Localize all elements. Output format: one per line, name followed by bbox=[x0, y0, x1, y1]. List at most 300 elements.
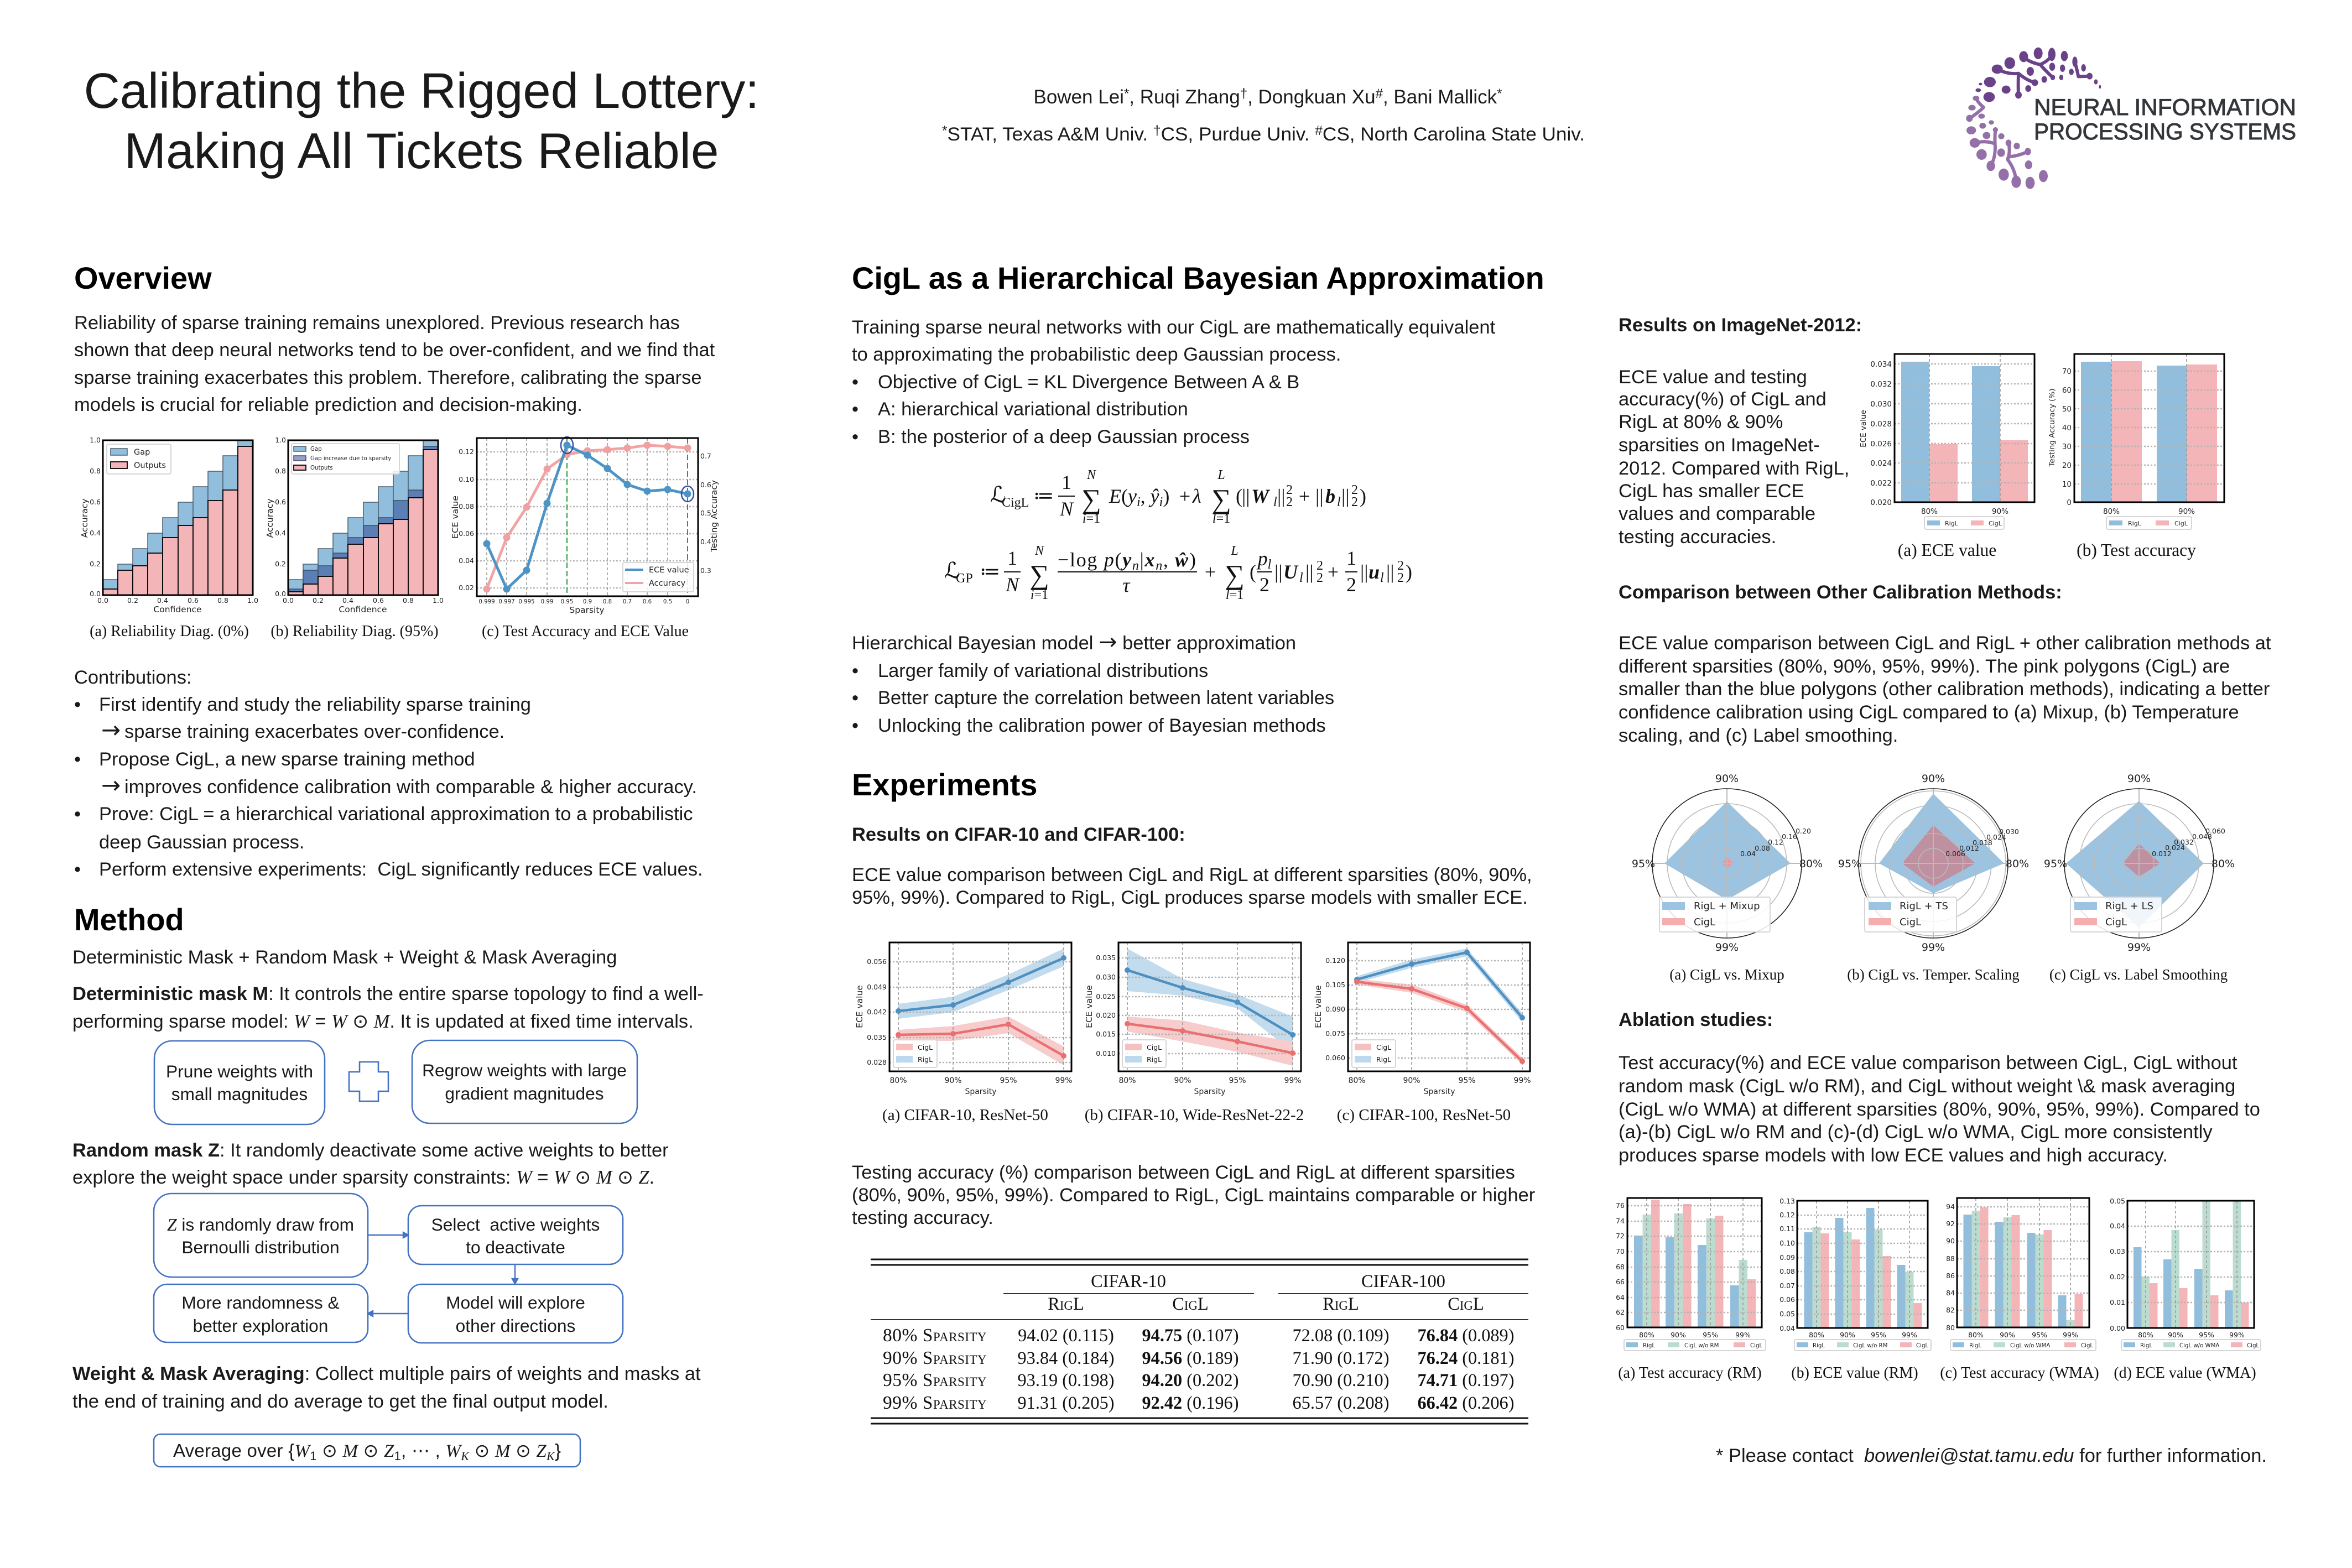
text block: contributions: → bbox=[101, 772, 121, 799]
text block: contributions: Propose CigL, a new sparse training method bbox=[99, 749, 475, 770]
line chart: CIFAR-10 Wide-ResNet-22-2 ECE: 0.025 bbox=[1096, 992, 1116, 1001]
formula box: average over: M ⊙ Z bbox=[342, 1440, 394, 1461]
equation: GP loss: ℒ bbox=[944, 558, 960, 583]
chart: reliability diagram 0%: Confidence bbox=[153, 605, 202, 614]
line chart: CIFAR-10 Wide-ResNet-22-2 ECE bbox=[1084, 942, 1302, 1096]
bar chart: test accuracy RM: CigL bbox=[1750, 1343, 1762, 1349]
formula box: average over: M ⊙ Z bbox=[495, 1440, 547, 1461]
radar chart: CigL vs Label Smoothing: 80% bbox=[2211, 858, 2235, 870]
text block: deterministic mask bbox=[72, 983, 704, 1032]
text block: ImageNet description: sparsities on ImageNet- bbox=[1619, 435, 1820, 456]
text block: contributions: Contributions: bbox=[74, 667, 191, 688]
bar chart: ImageNet ECE value: 0.030 bbox=[1870, 400, 1892, 409]
equation: CigL loss: 2 bbox=[1351, 483, 1358, 497]
radar chart: CigL vs Label Smoothing bbox=[2044, 773, 2235, 954]
bar chart: test accuracy RM: 66 bbox=[1616, 1278, 1625, 1286]
bar chart: ImageNet ECE value: 0.026 bbox=[1870, 440, 1892, 449]
bar chart: ECE value WMA: 0.00 bbox=[2110, 1324, 2125, 1332]
line chart: CIFAR-10 Wide-ResNet-22-2 ECE: 0.015 bbox=[1096, 1030, 1116, 1038]
table: testing accuracy results: CIFAR-100 bbox=[1361, 1271, 1445, 1291]
captions: ablation charts: (c) Test accuracy (WMA) bbox=[1940, 1364, 2099, 1382]
equation: GP loss: 2 bbox=[1346, 574, 1356, 596]
formula box: average over: K bbox=[546, 1449, 555, 1463]
bar chart: test accuracy WMA: 95% bbox=[2032, 1331, 2047, 1339]
equation: CigL loss: + bbox=[1179, 485, 1190, 507]
equation: GP loss: || bbox=[1386, 561, 1394, 583]
chart: reliability diagram 0%: 0.2 bbox=[90, 560, 101, 568]
bar chart: ImageNet ECE value: RigL bbox=[1945, 520, 1959, 527]
equation: CigL loss: 2 bbox=[1286, 483, 1293, 497]
text block: equivalence statement: Training sparse neural networks with our CigL are mathematically equivalent bbox=[852, 317, 1496, 338]
radar chart: CigL vs Temperature Scaling: 99% bbox=[1922, 941, 1945, 954]
chart: reliability diagram 95%: Gap bbox=[310, 446, 322, 452]
chart: reliability diagram 0%: 0.8 bbox=[217, 596, 228, 605]
bar chart: ImageNet ECE value: 0.028 bbox=[1870, 420, 1892, 429]
bar chart: test accuracy WMA: 92 bbox=[1946, 1220, 1955, 1228]
captions: overview figures: (b) Reliability Diag. (95%) bbox=[270, 623, 439, 640]
chart: reliability diagram 0%: Gap bbox=[134, 448, 150, 457]
equation: CigL loss: ) bbox=[1163, 485, 1169, 507]
bar chart: test accuracy RM: 80% bbox=[1639, 1331, 1654, 1339]
text block: ablation description: Test accuracy(%) and ECE value comparison between CigL, CigL without bbox=[1619, 1053, 2237, 1074]
logo: neural information processing systems bbox=[1966, 48, 2296, 189]
radar chart: CigL vs Mixup bbox=[1632, 773, 1823, 954]
chart: reliability diagram 95%: 1.0 bbox=[275, 436, 286, 444]
chart: reliability diagram 95%: 0.4 bbox=[275, 529, 286, 537]
table: testing accuracy results: 94.75 (0.107) bbox=[1142, 1325, 1239, 1345]
table: testing accuracy results: 94.56 (0.189) bbox=[1142, 1348, 1239, 1368]
text block: calibration comparison: ECE value comparison between CigL and RigL + other calibration methods at bbox=[1619, 633, 2271, 654]
bar chart: ImageNet test accuracy: 50 bbox=[2062, 405, 2072, 414]
equation: GP loss bbox=[944, 544, 1412, 602]
chart: test accuracy and ECE value vs sparsity: 0.06 bbox=[459, 529, 474, 538]
bar chart: ECE value RM: 0.04 bbox=[1779, 1324, 1795, 1332]
equation: CigL loss: λ bbox=[1192, 485, 1201, 507]
chart: test accuracy and ECE value vs sparsity: 0.5 bbox=[700, 509, 711, 517]
text block: hierarchical bayesian benefits: Unlocking the calibration power of Bayesian methods bbox=[878, 715, 1326, 736]
bar chart: ECE value RM: 80% bbox=[1809, 1331, 1824, 1339]
diagram: prune plus regrow: Regrow weights with large bbox=[422, 1060, 627, 1080]
bar chart: test accuracy RM: 74 bbox=[1616, 1217, 1625, 1225]
line chart: CIFAR-100 ResNet-50 ECE: 0.075 bbox=[1325, 1029, 1345, 1038]
flow diagram: random mask process: Bernoulli distribution bbox=[181, 1237, 340, 1257]
text block: deterministic mask: performing sparse model: W = W ⊙ M. It is updated at fixed time intervals. bbox=[72, 1011, 694, 1032]
table: testing accuracy results: 71.90 (0.172) bbox=[1293, 1348, 1389, 1368]
text block: calibration comparison: scaling, and (c) Label smoothing. bbox=[1619, 725, 1898, 746]
text block: calibration comparison: smaller than the blue polygons (other calibration methods), indicating a better bbox=[1619, 679, 2270, 700]
line chart: CIFAR-10 Wide-ResNet-22-2 ECE: 99% bbox=[1284, 1076, 1302, 1085]
captions: CIFAR charts: (b) CIFAR-10, Wide-ResNet-22-2 bbox=[1085, 1106, 1304, 1124]
equation: GP loss: u bbox=[1368, 561, 1380, 583]
text block: hierarchical bayesian benefits: • bbox=[852, 660, 858, 681]
flow diagram: random mask process: Z is randomly draw from bbox=[167, 1215, 354, 1234]
chart: test accuracy and ECE value vs sparsity: 0.8 bbox=[603, 599, 612, 605]
line chart: CIFAR-100 ResNet-50 ECE: 0.105 bbox=[1325, 981, 1345, 989]
bar chart: ImageNet ECE value: 0.020 bbox=[1870, 498, 1892, 507]
text block: ablation description: (a)-(b) CigL w/o RM and (c)-(d) CigL w/o WMA, CigL more consistently bbox=[1619, 1122, 2213, 1143]
table: testing accuracy results: 92.42 (0.196) bbox=[1142, 1393, 1239, 1413]
equation: CigL loss: i bbox=[1137, 495, 1141, 509]
radar chart: CigL vs Mixup: 95% bbox=[1632, 858, 1655, 870]
bar chart: ECE value WMA: 95% bbox=[2199, 1331, 2214, 1339]
text block: equivalence statement: A: hierarchical variational distribution bbox=[878, 399, 1188, 420]
radar chart: CigL vs Mixup: 0.16 bbox=[1782, 832, 1797, 841]
bar chart: ECE value RM: CigL bbox=[1916, 1343, 1928, 1349]
line chart: CIFAR-100 ResNet-50 ECE bbox=[1313, 942, 1531, 1096]
chart: test accuracy and ECE value vs sparsity: 0.7 bbox=[700, 452, 711, 460]
equation: GP loss: ( bbox=[1250, 561, 1256, 583]
text block: random mask: Random mask Z: It randomly deactivate some active weights to better bbox=[72, 1140, 669, 1161]
chart: test accuracy and ECE value vs sparsity: 0.997 bbox=[498, 599, 515, 605]
chart: reliability diagram 95%: Gap increase due to sparsity bbox=[310, 456, 391, 462]
line chart: CIFAR-100 ResNet-50 ECE: 0.060 bbox=[1325, 1054, 1345, 1062]
equation: GP loss: U bbox=[1283, 561, 1299, 583]
text block: contributions: First identify and study the reliability sparse training bbox=[99, 694, 531, 715]
equation: GP loss: 2 bbox=[1317, 559, 1323, 573]
diagram: prune plus regrow bbox=[154, 1040, 637, 1124]
line chart: CIFAR-100 ResNet-50 ECE: 90% bbox=[1403, 1076, 1420, 1085]
equation: CigL loss: ∑ bbox=[1081, 483, 1101, 514]
equation: CigL loss: b bbox=[1325, 485, 1335, 507]
line chart: CIFAR-10 ResNet-50 ECE: Sparsity bbox=[965, 1087, 997, 1096]
radar chart: CigL vs Temperature Scaling: 0.006 bbox=[1945, 850, 1965, 858]
text block: contributions: Prove: CigL = a hierarchical variational approximation to a probabilistic bbox=[99, 804, 693, 825]
bar chart: ECE value RM: CigL w/o RM bbox=[1853, 1343, 1887, 1349]
chart: test accuracy and ECE value vs sparsity: 0.9 bbox=[583, 599, 592, 605]
bar chart: test accuracy WMA: CigL bbox=[2081, 1343, 2093, 1349]
bar chart: ECE value WMA bbox=[2110, 1197, 2261, 1351]
radar chart: CigL vs Temperature Scaling: RigL + TS bbox=[1900, 900, 1948, 912]
text block: testing accuracy comparison: Testing accuracy (%) comparison between CigL and RigL at different sparsities bbox=[852, 1162, 1515, 1183]
chart: test accuracy and ECE value vs sparsity: 0.5 bbox=[663, 599, 672, 605]
text block: ablation description bbox=[1619, 1053, 2260, 1166]
line chart: CIFAR-10 Wide-ResNet-22-2 ECE: Sparsity bbox=[1194, 1087, 1226, 1096]
bar chart: test accuracy RM: 64 bbox=[1616, 1293, 1625, 1301]
line chart: CIFAR-10 ResNet-50 ECE: 95% bbox=[1000, 1076, 1017, 1085]
authors and affiliations: CS, North Carolina State Univ. bbox=[1323, 124, 1585, 145]
text block: equivalence statement: to approximating the probabilistic deep Gaussian process. bbox=[852, 344, 1341, 365]
chart: test accuracy and ECE value vs sparsity: Sparsity bbox=[569, 605, 605, 615]
equation: CigL loss: W bbox=[1251, 485, 1271, 507]
subheading: ablation studies: Ablation studies: bbox=[1619, 1009, 1773, 1030]
flow diagram: random mask process: More randomness & bbox=[181, 1293, 340, 1312]
radar chart: CigL vs Temperature Scaling: 0.024 bbox=[1986, 833, 2006, 841]
radar chart: CigL vs Label Smoothing: 0.032 bbox=[2174, 838, 2194, 846]
table: testing accuracy results: CIFAR-10 bbox=[1091, 1271, 1166, 1291]
bar chart: ECE value WMA: 99% bbox=[2229, 1331, 2245, 1339]
equation: GP loss: l bbox=[1380, 571, 1384, 585]
text block: contributions: sparse training exacerbates over-confidence. bbox=[124, 721, 504, 742]
equation: GP loss: 1 bbox=[1346, 547, 1356, 569]
bar chart: ECE value RM: 99% bbox=[1902, 1331, 1917, 1339]
equation: GP loss: || bbox=[1305, 561, 1313, 583]
text block: CIFAR ECE comparison: 95%, 99%). Compared to RigL, CigL produces sparse models with smaller ECE. bbox=[852, 887, 1528, 908]
bar chart: ImageNet test accuracy: CigL bbox=[2174, 520, 2188, 527]
table: testing accuracy results: RigL bbox=[1048, 1294, 1084, 1314]
authors and affiliations: # bbox=[1315, 123, 1323, 138]
chart: reliability diagram 95%: 0.6 bbox=[275, 498, 286, 506]
text block: overview intro bbox=[74, 312, 715, 415]
bar chart: ImageNet ECE value bbox=[1859, 354, 2034, 529]
radar chart: CigL vs Label Smoothing: RigL + LS bbox=[2105, 900, 2153, 912]
chart: test accuracy and ECE value vs sparsity: 0.6 bbox=[700, 481, 711, 489]
line chart: CIFAR-100 ResNet-50 ECE: 80% bbox=[1348, 1076, 1366, 1085]
equation: GP loss: 1 bbox=[1007, 547, 1017, 569]
chart: reliability diagram 0%: 0.2 bbox=[127, 596, 138, 605]
bar chart: test accuracy RM: CigL w/o RM bbox=[1684, 1343, 1719, 1349]
radar chart: CigL vs Label Smoothing: 0.048 bbox=[2192, 832, 2212, 841]
equation: CigL loss: 2 bbox=[1351, 495, 1358, 509]
chart: test accuracy and ECE value vs sparsity: 0.99 bbox=[541, 599, 553, 605]
equation: GP loss: ∑ bbox=[1029, 559, 1049, 590]
chart: reliability diagram 0%: 0.6 bbox=[90, 498, 101, 506]
chart: reliability diagram 95% bbox=[265, 436, 444, 614]
title: Calibrating the Rigged Lottery: bbox=[84, 63, 759, 119]
bar chart: ImageNet test accuracy: 80% bbox=[2103, 507, 2120, 516]
chart: test accuracy and ECE value vs sparsity: 0.3 bbox=[700, 566, 711, 575]
diagram: prune plus regrow: gradient magnitudes bbox=[445, 1083, 604, 1103]
radar chart: CigL vs Temperature Scaling: 80% bbox=[2006, 858, 2029, 870]
chart: reliability diagram 95%: 0.0 bbox=[283, 596, 294, 605]
table: testing accuracy results: CigL bbox=[1448, 1294, 1484, 1314]
text block: calibration comparison: different sparsities (80%, 90%, 95%, 99%). The pink polygons (CigL) are bbox=[1619, 656, 2230, 677]
line chart: CIFAR-100 ResNet-50 ECE: RigL bbox=[1376, 1055, 1391, 1064]
equation: GP loss: l=1 bbox=[1226, 588, 1243, 602]
text block: random mask bbox=[72, 1140, 669, 1188]
text block: deterministic mask: Deterministic mask M: It controls the entire sparse topology to find a well- bbox=[72, 983, 704, 1004]
bar chart: ECE value RM: 0.08 bbox=[1779, 1267, 1795, 1275]
bar chart: test accuracy RM: 62 bbox=[1616, 1308, 1625, 1316]
bar chart: test accuracy WMA: 94 bbox=[1946, 1202, 1955, 1211]
bar chart: ImageNet test accuracy: 60 bbox=[2062, 386, 2072, 395]
chart: test accuracy and ECE value vs sparsity: 0.04 bbox=[459, 556, 474, 565]
captions: ImageNet charts: (b) Test accuracy bbox=[2077, 540, 2196, 560]
captions: overview figures bbox=[90, 623, 689, 640]
text block: overview intro: shown that deep neural networks tend to be over-confident, and we find that bbox=[74, 340, 715, 361]
equation: GP loss: N bbox=[1005, 574, 1020, 596]
bar chart: ImageNet ECE value: 0.032 bbox=[1870, 380, 1892, 389]
bar chart: ECE value WMA: CigL bbox=[2247, 1343, 2259, 1349]
line chart: CIFAR-100 ResNet-50 ECE: 0.120 bbox=[1325, 956, 1345, 965]
captions: radar charts: (a) CigL vs. Mixup bbox=[1669, 966, 1784, 983]
captions: ImageNet charts bbox=[1898, 540, 2196, 560]
equation: GP loss: + bbox=[1328, 561, 1339, 583]
text block: equivalence statement: Objective of CigL = KL Divergence Between A & B bbox=[878, 372, 1299, 393]
bar chart: ImageNet ECE value: 80% bbox=[1921, 507, 1938, 516]
bar chart: test accuracy RM: 90% bbox=[1671, 1331, 1686, 1339]
formula box: average over: } bbox=[555, 1440, 561, 1461]
text block: hierarchical bayesian benefits: • bbox=[852, 687, 858, 709]
equation: CigL loss: i bbox=[1159, 495, 1163, 509]
subheading: ImageNet results: Results on ImageNet-2012: bbox=[1619, 315, 1862, 336]
bar chart: ECE value WMA: 90% bbox=[2168, 1331, 2183, 1339]
equation: CigL loss: l=1 bbox=[1213, 512, 1230, 526]
bar chart: ECE value RM: 95% bbox=[1871, 1331, 1886, 1339]
text block: contributions: deep Gaussian process. bbox=[99, 832, 304, 853]
line chart: CIFAR-10 ResNet-50 ECE: 0.049 bbox=[867, 983, 887, 991]
text block: CIFAR ECE comparison bbox=[852, 864, 1532, 908]
bar chart: ImageNet test accuracy: 20 bbox=[2062, 461, 2072, 470]
line chart: CIFAR-10 ResNet-50 ECE: 0.028 bbox=[867, 1058, 887, 1066]
bar chart: test accuracy RM: 72 bbox=[1616, 1232, 1625, 1240]
table: testing accuracy results: 91.31 (0.205) bbox=[1018, 1393, 1114, 1413]
equation: CigL loss: || bbox=[1315, 485, 1323, 507]
chart: reliability diagram 95%: 0.0 bbox=[275, 590, 286, 598]
chart: test accuracy and ECE value vs sparsity: 0.6 bbox=[643, 599, 652, 605]
line chart: CIFAR-100 ResNet-50 ECE: Sparsity bbox=[1423, 1087, 1455, 1096]
captions: radar charts: (b) CigL vs. Temper. Scaling bbox=[1847, 966, 2020, 983]
text block: testing accuracy comparison: (80%, 90%, 95%, 99%). Compared to RigL, CigL maintains comparable or higher bbox=[852, 1185, 1535, 1206]
bar chart: ImageNet ECE value: CigL bbox=[1989, 520, 2002, 527]
line chart: CIFAR-10 Wide-ResNet-22-2 ECE: RigL bbox=[1147, 1055, 1162, 1064]
captions: ImageNet charts: (a) ECE value bbox=[1898, 540, 1996, 560]
text block: testing accuracy comparison bbox=[852, 1162, 1535, 1228]
table: testing accuracy results: 65.57 (0.208) bbox=[1293, 1393, 1389, 1413]
captions: radar charts bbox=[1669, 966, 2228, 983]
equation: GP loss: || bbox=[1360, 561, 1368, 583]
text block: ablation description: (CigL w/o WMA) at different sparsities (80%, 90%, 95%, 99%). Compared to bbox=[1619, 1099, 2260, 1120]
formula box: average over: , ⋯ , bbox=[401, 1440, 445, 1461]
equation: CigL loss: 2 bbox=[1286, 495, 1293, 509]
equation: GP loss: N bbox=[1034, 544, 1045, 558]
equation: CigL loss: N bbox=[1059, 498, 1074, 520]
equation: CigL loss bbox=[990, 468, 1366, 526]
radar chart: CigL vs Temperature Scaling: 90% bbox=[1922, 773, 1945, 785]
captions: ablation charts: (a) Test accuracy (RM) bbox=[1618, 1364, 1762, 1382]
chart: reliability diagram 0%: 0.0 bbox=[90, 590, 101, 598]
bar chart: ImageNet ECE value: 0.034 bbox=[1870, 360, 1892, 369]
subheading: other calibration methods: Comparison between Other Calibration Methods: bbox=[1619, 582, 2062, 603]
chart: reliability diagram 0%: 0.4 bbox=[90, 529, 101, 537]
chart: reliability diagram 95%: 0.8 bbox=[403, 596, 414, 605]
radar chart: CigL vs Mixup: 0.08 bbox=[1755, 844, 1770, 852]
bar chart: ECE value RM: 0.05 bbox=[1779, 1310, 1795, 1318]
radar chart: CigL vs Label Smoothing: CigL bbox=[2105, 916, 2127, 928]
bar chart: test accuracy RM: 70 bbox=[1616, 1247, 1625, 1256]
equation: CigL loss: E(y bbox=[1109, 485, 1137, 507]
chart: test accuracy and ECE value vs sparsity: 0 bbox=[686, 599, 689, 605]
text block: overview intro: Reliability of sparse training remains unexplored. Previous research has bbox=[74, 312, 680, 334]
radar chart: CigL vs Mixup: 0.04 bbox=[1740, 850, 1756, 858]
chart: test accuracy and ECE value vs sparsity: ECE value bbox=[649, 566, 689, 575]
chart: reliability diagram 0%: 0.4 bbox=[157, 596, 168, 605]
table: testing accuracy results: 74.71 (0.197) bbox=[1418, 1370, 1514, 1390]
line chart: CIFAR-10 ResNet-50 ECE: 0.056 bbox=[867, 957, 887, 966]
chart: test accuracy and ECE value vs sparsity bbox=[450, 437, 719, 615]
chart: reliability diagram 0%: 0.0 bbox=[97, 596, 108, 605]
line chart: CIFAR-10 Wide-ResNet-22-2 ECE: 95% bbox=[1229, 1076, 1246, 1085]
chart: test accuracy and ECE value vs sparsity: 0.999 bbox=[478, 599, 495, 605]
line chart: CIFAR-100 ResNet-50 ECE: CigL bbox=[1376, 1043, 1391, 1051]
captions: ablation charts: (d) ECE value (WMA) bbox=[2114, 1364, 2256, 1382]
bar chart: ECE value RM: 0.13 bbox=[1779, 1197, 1795, 1205]
bar chart: ECE value WMA: 0.02 bbox=[2110, 1273, 2125, 1281]
formula box: average over: ⊙ bbox=[469, 1440, 495, 1461]
text block: ImageNet description: 2012. Compared with RigL, bbox=[1619, 458, 1849, 479]
diagram: prune plus regrow: small magnitudes bbox=[171, 1084, 308, 1104]
radar chart: CigL vs Mixup: 99% bbox=[1715, 941, 1739, 954]
radar chart: CigL vs Label Smoothing: 90% bbox=[2127, 773, 2151, 785]
line chart: CIFAR-10 Wide-ResNet-22-2 ECE: ECE value bbox=[1084, 985, 1094, 1028]
bar chart: test accuracy WMA: 99% bbox=[2063, 1331, 2078, 1339]
captions: radar charts: (c) CigL vs. Label Smoothing bbox=[2049, 966, 2228, 983]
line chart: CIFAR-10 ResNet-50 ECE: 0.042 bbox=[867, 1008, 887, 1016]
bar chart: ECE value RM: 0.12 bbox=[1779, 1211, 1795, 1219]
authors and affiliations: CS, Purdue Univ. bbox=[1161, 124, 1315, 145]
chart: reliability diagram 95%: 0.2 bbox=[275, 560, 286, 568]
chart: test accuracy and ECE value vs sparsity: Testing Accuracy bbox=[709, 480, 719, 553]
text block: ImageNet description: CigL has smaller ECE bbox=[1619, 481, 1804, 502]
bar chart: test accuracy RM bbox=[1616, 1198, 1766, 1351]
chart: reliability diagram 0% bbox=[80, 436, 258, 614]
bar chart: test accuracy RM: 76 bbox=[1616, 1201, 1625, 1210]
bar chart: ECE value RM: 0.09 bbox=[1779, 1253, 1795, 1262]
text block: ImageNet description bbox=[1619, 367, 1849, 548]
radar chart: CigL vs Mixup: RigL + Mixup bbox=[1694, 900, 1760, 912]
bar chart: ECE value RM: RigL bbox=[1813, 1343, 1825, 1349]
line chart: CIFAR-10 ResNet-50 ECE bbox=[855, 942, 1073, 1096]
text block: contributions: Perform extensive experiments: CigL significantly reduces ECE values. bbox=[99, 859, 703, 880]
bar chart: ImageNet test accuracy: 40 bbox=[2062, 424, 2072, 433]
bar chart: ImageNet test accuracy: 70 bbox=[2062, 367, 2072, 376]
text block: contributions: → bbox=[101, 716, 121, 743]
text block: calibration comparison bbox=[1619, 633, 2271, 746]
line chart: CIFAR-100 ResNet-50 ECE: 99% bbox=[1513, 1076, 1531, 1085]
radar chart: CigL vs Temperature Scaling: CigL bbox=[1900, 916, 1921, 928]
chart: reliability diagram 95%: Confidence bbox=[339, 605, 387, 614]
bar chart: test accuracy RM: 95% bbox=[1703, 1331, 1718, 1339]
bar chart: ImageNet test accuracy: 0 bbox=[2067, 498, 2072, 507]
bar chart: test accuracy WMA: CigL w/o WMA bbox=[2010, 1343, 2050, 1349]
chart: test accuracy and ECE value vs sparsity: 0.12 bbox=[459, 447, 474, 456]
bar chart: ECE value RM: 0.10 bbox=[1779, 1239, 1795, 1247]
equation: GP loss: ≔ bbox=[980, 560, 1000, 582]
chart: reliability diagram 95%: 1.0 bbox=[433, 596, 444, 605]
equation: GP loss: | bbox=[1140, 549, 1144, 571]
bar chart: test accuracy RM: 99% bbox=[1735, 1331, 1751, 1339]
equation: GP loss: p bbox=[1256, 548, 1268, 570]
text block: weight and mask averaging: Weight & Mask Averaging: Collect multiple pairs of weights and masks at bbox=[72, 1363, 701, 1384]
chart: test accuracy and ECE value vs sparsity: 0.995 bbox=[518, 599, 535, 605]
captions: CIFAR charts: (a) CIFAR-10, ResNet-50 bbox=[882, 1106, 1048, 1124]
radar chart: CigL vs Mixup: 80% bbox=[1799, 858, 1823, 870]
line chart: CIFAR-10 Wide-ResNet-22-2 ECE: 0.020 bbox=[1096, 1011, 1116, 1019]
radar chart: CigL vs Label Smoothing: 0.012 bbox=[2152, 850, 2172, 858]
table: testing accuracy results bbox=[871, 1259, 1528, 1424]
equation: CigL loss: + bbox=[1299, 485, 1310, 507]
bar chart: ECE value WMA: 0.03 bbox=[2110, 1247, 2125, 1256]
chart: reliability diagram 95%: 0.6 bbox=[373, 596, 384, 605]
bar chart: ECE value RM bbox=[1779, 1197, 1931, 1351]
bar chart: ECE value WMA: 0.01 bbox=[2110, 1298, 2125, 1306]
radar chart: CigL vs Mixup: 0.20 bbox=[1796, 827, 1811, 835]
radar chart: CigL vs Temperature Scaling: 0.012 bbox=[1959, 844, 1979, 852]
authors and affiliations: † bbox=[1240, 86, 1247, 101]
bar chart: test accuracy WMA: 88 bbox=[1946, 1254, 1955, 1263]
equation: CigL loss: l bbox=[1273, 495, 1277, 509]
table: testing accuracy results: 99% Sparsity bbox=[883, 1393, 987, 1413]
text block: ImageNet description: testing accuracies. bbox=[1619, 527, 1776, 548]
authors and affiliations: * bbox=[1497, 86, 1502, 101]
authors and affiliations: STAT, Texas A&M Univ. bbox=[948, 124, 1153, 145]
table: testing accuracy results: RigL bbox=[1323, 1294, 1359, 1314]
text block: contributions bbox=[74, 667, 703, 880]
equation: GP loss: n bbox=[1156, 559, 1162, 573]
equation: GP loss: x bbox=[1144, 549, 1155, 571]
radar chart: CigL vs Mixup: 90% bbox=[1715, 773, 1739, 785]
formula box: average over bbox=[154, 1434, 580, 1467]
authors and affiliations: * bbox=[1124, 86, 1129, 101]
